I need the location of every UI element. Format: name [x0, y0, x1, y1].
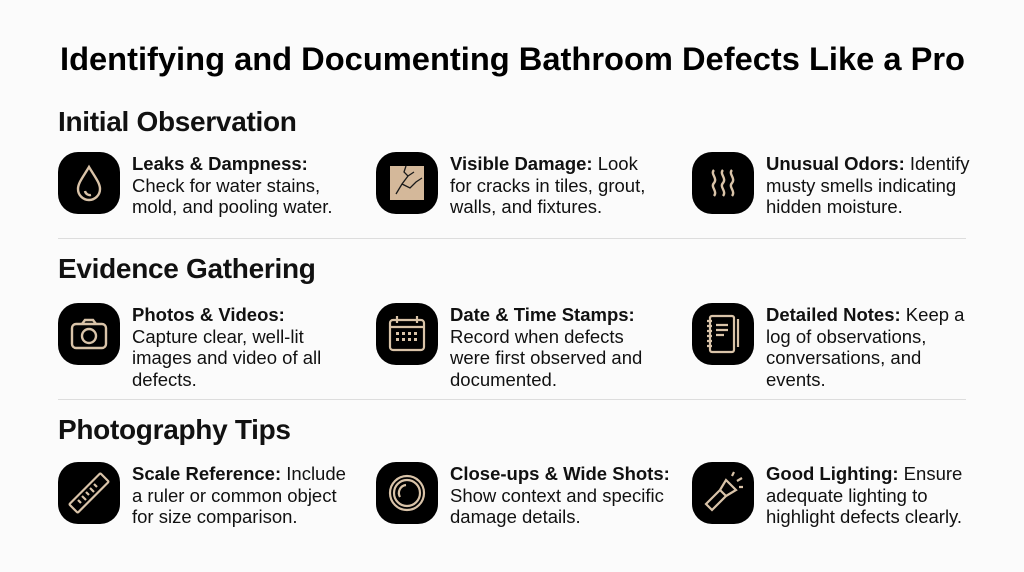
item: photos: [58, 303, 321, 390]
item: closeups: [376, 462, 670, 527]
text: log of observations,: [766, 326, 926, 346]
item: lighting: [692, 462, 962, 527]
text: [766, 153, 970, 217]
icon: cracked tile: [376, 152, 438, 214]
text: images and video of all: [132, 347, 321, 368]
text: damage details.: [450, 506, 581, 527]
text: a ruler or common object: [132, 484, 337, 506]
heading: Initial Observation: Initial Observation: [58, 106, 297, 137]
text: [450, 153, 645, 217]
text: events.: [766, 368, 826, 390]
text: Date & Time Stamps:: [450, 304, 635, 325]
icon: lens: [376, 462, 438, 524]
text: [132, 463, 346, 527]
text: conversations, and: [766, 347, 921, 368]
title: Identifying and Documenting Bathroom Defects Like a Pro: [60, 41, 965, 77]
text: Visible Damage: Look: [450, 153, 638, 174]
item: damage: [376, 152, 645, 217]
text: Leaks & Dampness:: [132, 153, 308, 174]
text: mold, and pooling water.: [132, 196, 333, 217]
text: walls, and fixtures.: [450, 196, 602, 217]
text: Record when defects: [450, 326, 624, 346]
heading: Evidence Gathering: Evidence Gathering: [58, 253, 316, 284]
text: Unusual Odors: Identify: [766, 153, 970, 174]
icon: flashlight: [692, 462, 754, 524]
text: hidden moisture.: [766, 196, 903, 217]
text: Scale Reference: Include: [132, 463, 346, 484]
text: Photos & Videos:: [132, 304, 285, 325]
text: Detailed Notes: Keep a: [766, 304, 964, 325]
icon: camera: [58, 303, 120, 365]
text: Show context and specific: [450, 484, 664, 506]
heading: Photography Tips: Photography Tips: [58, 414, 291, 445]
text: Check for water stains,: [132, 174, 320, 196]
text: musty smells indicating: [766, 174, 956, 196]
text: highlight defects clearly.: [766, 506, 962, 527]
item: notes: [692, 303, 964, 390]
icon: water drop: [58, 152, 120, 214]
icon: calendar: [376, 303, 438, 365]
text: [450, 463, 670, 527]
icon: odor waves: [692, 152, 754, 214]
text: for cracks in tiles, grout,: [450, 174, 645, 196]
text: for size comparison.: [132, 506, 298, 527]
icon: ruler: [58, 462, 120, 524]
item: date: [376, 303, 642, 390]
text: defects.: [132, 368, 197, 390]
text: [766, 463, 962, 527]
text: [450, 304, 642, 390]
icon: notebook: [692, 303, 754, 365]
text: [132, 153, 333, 217]
text: [766, 304, 964, 390]
item: leaks: [58, 152, 333, 217]
text: Close-ups & Wide Shots:: [450, 463, 670, 484]
text: adequate lighting to: [766, 484, 928, 506]
text: documented.: [450, 368, 557, 390]
item: scale: [58, 462, 346, 527]
text: Capture clear, well-lit: [132, 326, 304, 346]
text: were first observed and: [450, 347, 642, 368]
item: odors: [692, 152, 970, 217]
text: Good Lighting: Ensure: [766, 463, 962, 484]
text: [132, 304, 321, 390]
